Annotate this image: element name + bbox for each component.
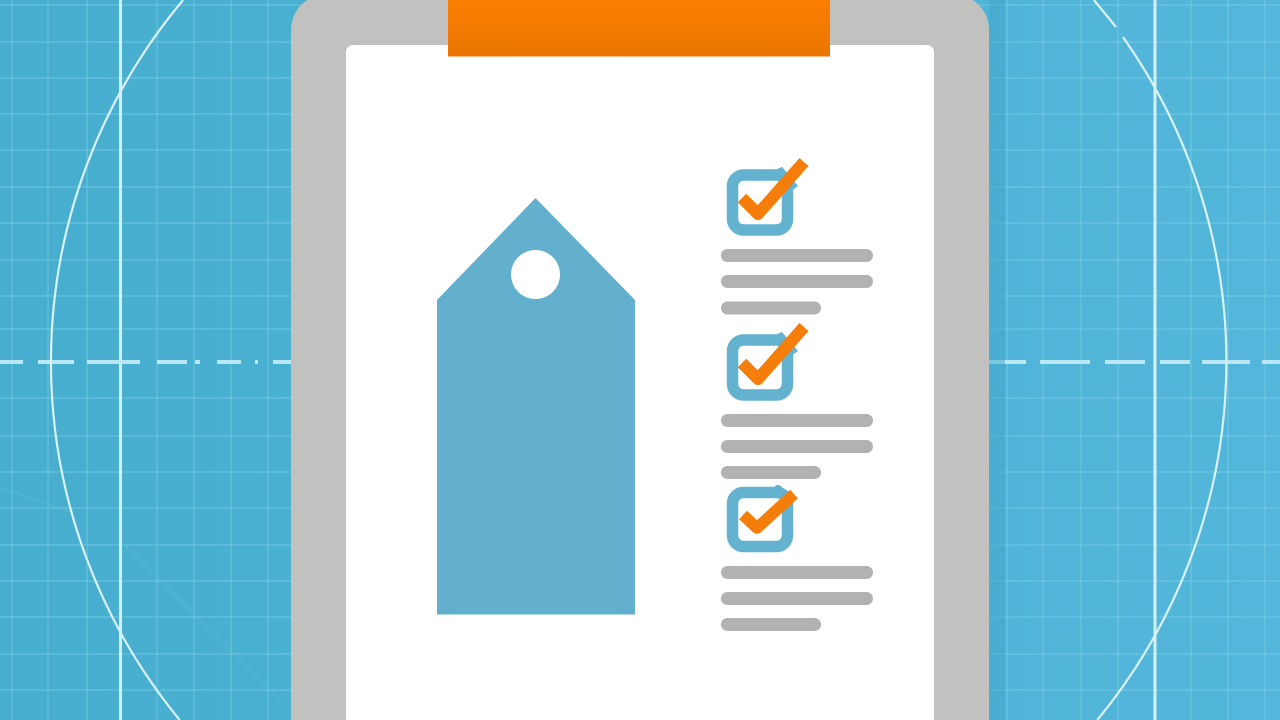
orange clip (448, 0, 830, 56)
checklist item 1 (721, 162, 873, 314)
horizontal dash-dot centre line (0, 360, 1280, 364)
clipboard board (291, 0, 989, 720)
icon: checkbox 2 (732, 332, 798, 395)
checklist item 2 (721, 327, 873, 479)
clipboard (291, 0, 989, 720)
text lines 1 (721, 249, 873, 314)
icon: check mark 1 (742, 162, 804, 214)
text lines 2 (721, 414, 873, 479)
icon: checkbox 3 (732, 485, 788, 546)
icon: check mark 2 (742, 327, 804, 379)
icon: check mark 3 (743, 494, 794, 528)
checklist item 3 (721, 485, 873, 631)
icon: price tag (437, 198, 635, 614)
clipboard shadow (989, 0, 1005, 720)
paper sheet (346, 45, 934, 720)
icon: checkbox 1 (732, 167, 798, 230)
text lines 3 (721, 566, 873, 631)
